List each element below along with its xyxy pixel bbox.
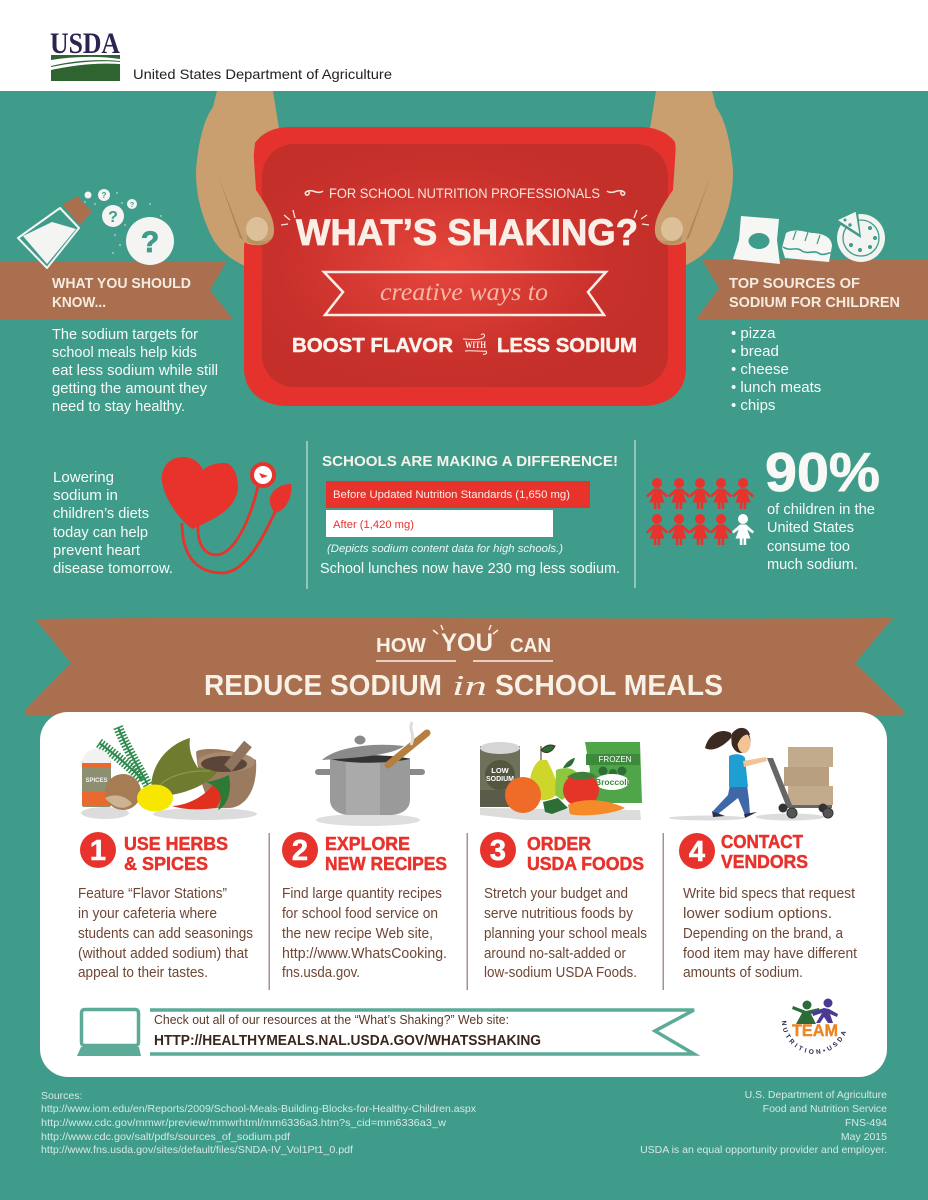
icon: salt shaker with question bubbles: ? bbox=[108, 209, 118, 226]
step 4 text: Write bid specs that request bbox=[683, 886, 855, 902]
step 2 heading: NEW RECIPES bbox=[325, 854, 447, 874]
illustration: USDA foods: LOW bbox=[491, 766, 510, 775]
sources: http://www.cdc.gov/mmwr/preview/mmwrhtml/mm6336a3.htm?s_cid=mm6336a3_w bbox=[41, 1117, 446, 1129]
illustration: USDA foods: SODIUM bbox=[486, 776, 514, 783]
step 3 text: around no-salt-added or bbox=[484, 946, 626, 962]
step 2 heading: 2 bbox=[292, 835, 308, 867]
ribbon: top sources of sodium bbox=[697, 260, 928, 320]
subtitle bbox=[292, 334, 637, 357]
illustration: USDA foods: FROZEN bbox=[599, 755, 632, 764]
step 2 heading bbox=[282, 832, 447, 874]
step 4 heading: VENDORS bbox=[721, 852, 808, 872]
step 2 text: http://www.WhatsCooking. bbox=[282, 946, 447, 962]
chart note: (Depicts sodium content data for high schools.) bbox=[327, 543, 563, 555]
list: sodium sources: • pizza bbox=[731, 325, 776, 342]
icon: chip bag bbox=[733, 216, 780, 264]
step 2 text: fns.usda.gov. bbox=[282, 965, 360, 981]
publisher information: May 2015 bbox=[841, 1131, 887, 1143]
step 1 text: appeal to their tastes. bbox=[78, 965, 208, 981]
icon: ten children, nine red, one white bbox=[646, 478, 754, 545]
chart takeaway: School lunches now have 230 mg less sodium. bbox=[320, 561, 620, 577]
sources: http://www.cdc.gov/salt/pdfs/sources_of_sodium.pdf bbox=[41, 1131, 290, 1143]
text: 90 percent description: much sodium. bbox=[767, 556, 858, 573]
USDA logo bbox=[50, 27, 120, 81]
step 1 text: Feature “Flavor Stations” bbox=[78, 886, 227, 902]
icon: laptop bbox=[77, 1010, 141, 1056]
left thumb over tray bbox=[218, 145, 274, 245]
step 1 text bbox=[78, 886, 253, 981]
step 2 heading: EXPLORE bbox=[325, 834, 410, 854]
step 1 heading: 1 bbox=[90, 835, 106, 867]
ribbon: how you can reduce sodium heading: HOW bbox=[376, 635, 426, 657]
ribbon: top sources of sodium: SODIUM FOR CHILDREN bbox=[729, 294, 900, 311]
icon: pizza bbox=[836, 211, 885, 262]
step 4 heading: 4 bbox=[689, 836, 705, 868]
icon: heart with blood pressure cuff bbox=[162, 457, 291, 573]
right hand holding tray bbox=[649, 91, 733, 270]
bar: before: Before Updated Nutrition Standards (1,650 mg) bbox=[333, 489, 570, 501]
bar: after bbox=[326, 510, 553, 537]
illustration: cooking pot bbox=[315, 722, 427, 826]
step 1 text: in your cafeteria where bbox=[78, 906, 217, 922]
banner: resources web site: HTTP://HEALTHYMEALS.NAL.USDA.GOV/WHATSSHAKING bbox=[154, 1033, 541, 1049]
step 4 heading: CONTACT bbox=[721, 832, 803, 852]
step 2 text: the new recipe Web site, bbox=[282, 926, 433, 942]
text: 90 percent description: consume too bbox=[767, 538, 850, 555]
text: lowering sodium: sodium in bbox=[53, 487, 118, 504]
panel: ways to reduce sodium bbox=[40, 712, 887, 1077]
step 3 heading bbox=[480, 832, 644, 874]
subtitle: LESS SODIUM bbox=[497, 334, 637, 357]
publisher information bbox=[640, 1089, 887, 1156]
step 4 text bbox=[683, 886, 857, 981]
illustration: USDA foods bbox=[480, 742, 642, 820]
text: lowering sodium: children’s diets bbox=[53, 505, 149, 522]
step 4 text: lower sodium options. bbox=[683, 906, 832, 922]
text: lowering sodium: today can help bbox=[53, 524, 148, 541]
ribbon: what you should know: WHAT YOU SHOULD bbox=[52, 275, 191, 292]
sources: http://www.iom.edu/en/Reports/2009/School-Meals-Building-Blocks-for-Healthy-Children.aspx bbox=[41, 1103, 477, 1115]
icon: sandwich bbox=[782, 231, 832, 262]
illustration: USDA foods: Broccoli bbox=[595, 777, 629, 787]
banner: resources web site bbox=[150, 1010, 694, 1054]
text: sodium targets: getting the amount they bbox=[52, 380, 207, 397]
step 1 text: students can add seasonings bbox=[78, 926, 253, 942]
sources bbox=[41, 1090, 477, 1156]
step 3 text bbox=[484, 886, 647, 981]
chart: schools are making a difference bbox=[320, 454, 620, 577]
text: lowering sodium: disease tomorrow. bbox=[53, 560, 173, 577]
step 3 heading: 3 bbox=[490, 835, 506, 867]
bar: after: After (1,420 mg) bbox=[333, 519, 414, 531]
ribbon: how you can reduce sodium heading: in bbox=[452, 671, 487, 702]
list: sodium sources: • cheese bbox=[731, 361, 789, 378]
step 3 text: low-sodium USDA Foods. bbox=[484, 965, 637, 981]
ribbon: how you can reduce sodium heading: SCHOOL MEALS bbox=[495, 670, 723, 702]
text: sodium targets: school meals help kids bbox=[52, 344, 197, 361]
step 1 heading bbox=[80, 832, 228, 874]
icon: salt shaker with question bubbles: ? bbox=[130, 202, 134, 209]
illustration: woman pushing cart bbox=[669, 728, 833, 820]
text: 90 percent description bbox=[767, 501, 875, 573]
list: sodium sources: • bread bbox=[731, 343, 779, 360]
bar: before bbox=[326, 481, 590, 508]
step 4 text: amounts of sodium. bbox=[683, 965, 803, 981]
red tray title panel bbox=[244, 127, 686, 406]
step 2 text bbox=[282, 886, 447, 981]
icon: salt shaker with question bubbles: ? bbox=[141, 226, 159, 259]
illustration: herbs and spices bbox=[81, 727, 257, 820]
text: lowering sodium bbox=[53, 469, 173, 577]
list: sodium sources: • lunch meats bbox=[731, 379, 821, 396]
step 3 heading: USDA FOODS bbox=[527, 854, 644, 874]
icon: salt shaker with question bubbles bbox=[18, 189, 174, 268]
header: USDA logo and department name bbox=[0, 0, 928, 91]
chart heading: SCHOOLS ARE MAKING A DIFFERENCE! bbox=[322, 454, 618, 470]
ribbon: what you should know: KNOW... bbox=[52, 294, 106, 311]
step 2 text: for school food service on bbox=[282, 906, 438, 922]
banner: creative ways to: creative ways to bbox=[380, 279, 548, 306]
text: lowering sodium: Lowering bbox=[53, 469, 114, 486]
USDA logo: USDA bbox=[50, 27, 120, 60]
text: sodium targets: The sodium targets for bbox=[52, 326, 198, 343]
left hand holding tray bbox=[196, 91, 280, 270]
step 1 heading: USE HERBS bbox=[124, 834, 228, 854]
text: 90 percent description: United States bbox=[767, 519, 854, 536]
step 4 text: food item may have different bbox=[683, 946, 857, 962]
stat: 90 percent: 90% bbox=[765, 441, 880, 503]
tagline: FOR SCHOOL NUTRITION PROFESSIONALS bbox=[329, 185, 600, 201]
sources: Sources: bbox=[41, 1090, 82, 1102]
logo: Team Nutrition: NUTRITION•USDA bbox=[782, 1020, 846, 1054]
list: sodium sources bbox=[731, 325, 821, 414]
text: sodium targets: need to stay healthy. bbox=[52, 398, 185, 415]
banner: resources web site: Check out all of our resources at the “What’s Shaking?” Web site: bbox=[154, 1013, 509, 1027]
step 4 text: Depending on the brand, a bbox=[683, 926, 844, 942]
step 1 text: (without added sodium) that bbox=[78, 946, 248, 962]
department name: United States Department of Agriculture bbox=[133, 66, 392, 82]
text: lowering sodium: prevent heart bbox=[53, 542, 141, 559]
publisher information: U.S. Department of Agriculture bbox=[745, 1089, 887, 1101]
ribbon: what you should know bbox=[0, 261, 232, 320]
step 3 text: serve nutritious foods by bbox=[484, 906, 634, 922]
text: sodium targets bbox=[52, 326, 218, 415]
list: sodium sources: • chips bbox=[731, 397, 775, 414]
step 3 text: Stretch your budget and bbox=[484, 886, 628, 902]
logo: Team Nutrition: TEAM bbox=[792, 1021, 838, 1040]
illustration: herbs and spices: SPICES bbox=[85, 778, 108, 784]
step 3 text: planning your school meals bbox=[484, 926, 647, 942]
step 4 heading bbox=[679, 832, 808, 872]
text: 90 percent description: of children in the bbox=[767, 501, 875, 518]
step 2 text: Find large quantity recipes bbox=[282, 886, 442, 902]
ribbon: top sources of sodium: TOP SOURCES OF bbox=[729, 275, 860, 292]
publisher information: FNS-494 bbox=[845, 1117, 887, 1129]
ribbon: how you can reduce sodium heading: CAN bbox=[510, 635, 551, 657]
step 3 heading: ORDER bbox=[527, 834, 591, 854]
ribbon: how you can reduce sodium heading: REDUCE SODIUM bbox=[204, 670, 442, 702]
publisher information: USDA is an equal opportunity provider and employer. bbox=[640, 1144, 887, 1156]
subtitle: WITH bbox=[465, 340, 486, 350]
icon: salt shaker with question bubbles: ? bbox=[102, 191, 107, 200]
sources: http://www.fns.usda.gov/sites/default/files/SNDA-IV_Vol1Pt1_0.pdf bbox=[41, 1144, 353, 1156]
icons: chips, sandwich, pizza bbox=[733, 211, 885, 264]
publisher information: Food and Nutrition Service bbox=[763, 1103, 887, 1115]
ribbon: how you can reduce sodium heading: YOU bbox=[441, 629, 493, 657]
banner: creative ways to bbox=[324, 272, 606, 315]
logo: Team Nutrition bbox=[782, 998, 846, 1054]
text: sodium targets: eat less sodium while still bbox=[52, 362, 218, 379]
subtitle: BOOST FLAVOR bbox=[292, 334, 453, 357]
ribbon: how you can reduce sodium heading bbox=[25, 618, 903, 716]
right thumb over tray bbox=[655, 145, 711, 245]
step 1 heading: & SPICES bbox=[124, 854, 208, 874]
main title: WHAT’S SHAKING? bbox=[296, 211, 638, 253]
